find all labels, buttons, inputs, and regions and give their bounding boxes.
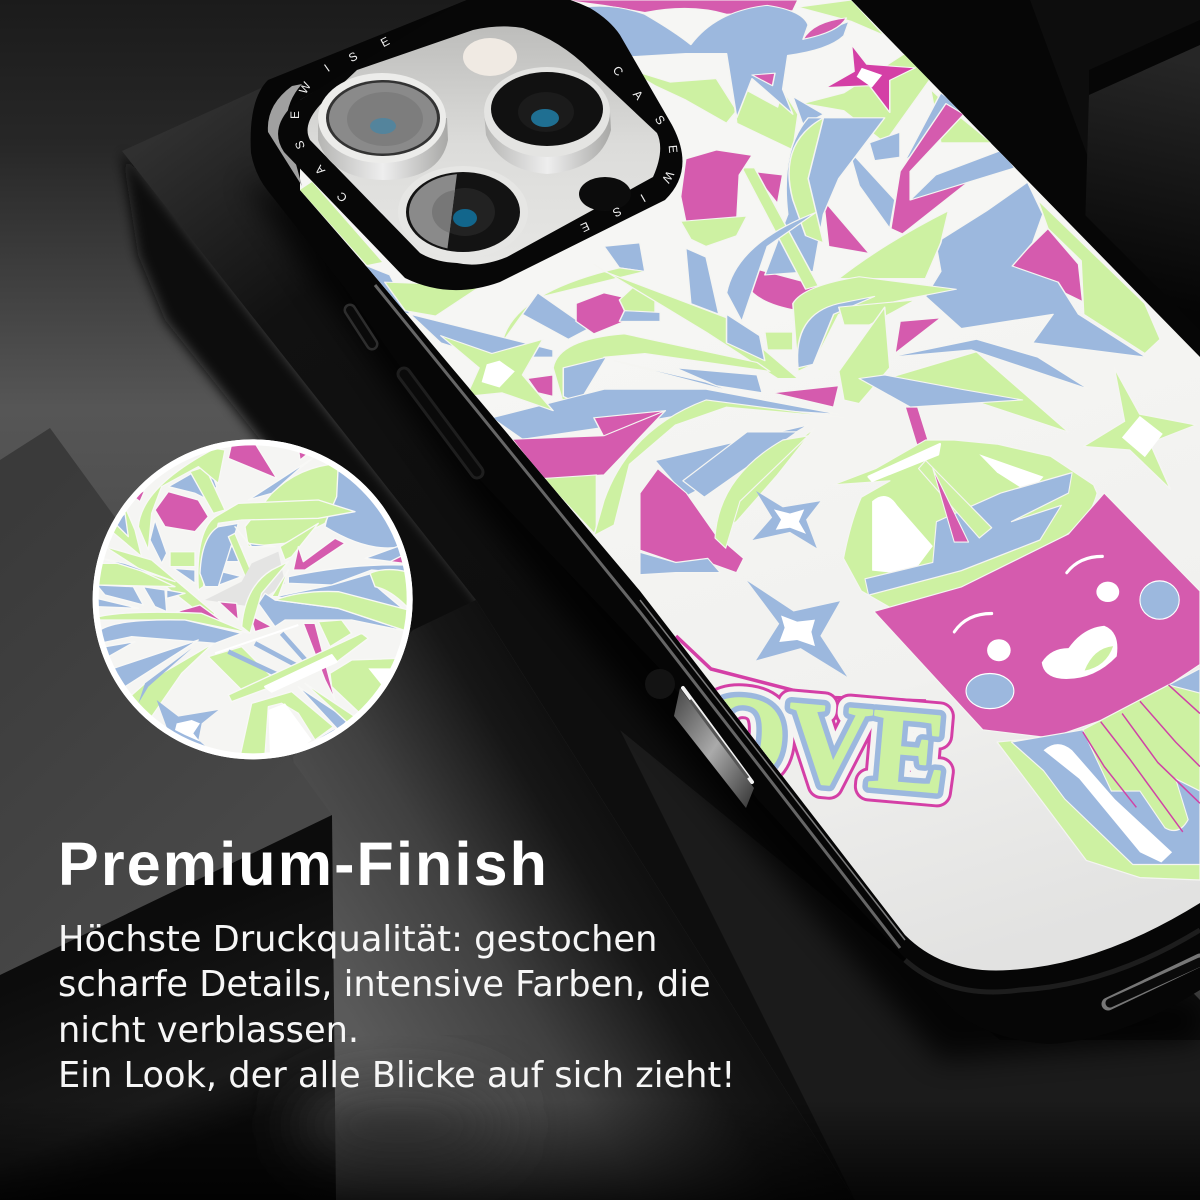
large blue star [747, 581, 847, 677]
flash [463, 38, 517, 76]
lower band [293, 600, 855, 1200]
case shadow [245, 180, 1200, 1060]
bezel brand text: E [288, 111, 302, 119]
bezel brand text: E [578, 219, 592, 235]
case highlight lines [375, 285, 900, 948]
face [954, 556, 1179, 709]
text block [58, 830, 735, 1096]
case body [251, 0, 1200, 1044]
power button recess [645, 669, 675, 699]
body copy: Höchste Druckqualität: gestochen [58, 919, 657, 960]
lower block top [0, 428, 332, 975]
small blue star [752, 491, 820, 548]
body copy [58, 919, 735, 1096]
jar and face artwork [640, 432, 1200, 880]
grey case reflection [268, 84, 302, 186]
sensor [579, 177, 631, 211]
bezel brand text: S [610, 204, 624, 220]
LOVE lettering: LOVE [614, 663, 953, 819]
bezel brand text: E [666, 144, 680, 154]
jar in detail [210, 648, 270, 688]
bezel brand text: A [630, 87, 646, 103]
phone case [245, 0, 1200, 1060]
block shadow wedge [122, 151, 500, 660]
body copy: nicht verblassen. [58, 1010, 359, 1051]
LOVE lettering: LOVE [614, 663, 953, 819]
bezel brand text: E [378, 34, 392, 50]
side art sliver [300, 182, 382, 265]
bezel brand text: I [322, 61, 332, 75]
bezel brand text: W [296, 79, 314, 96]
right block [1085, 45, 1200, 350]
bezel brand text: S [652, 113, 668, 127]
bezel brand text: I [638, 191, 648, 205]
camera ring [278, 0, 682, 290]
jar [833, 440, 1097, 607]
heading: Premium-Finish [58, 830, 549, 898]
ultra wide lens [318, 73, 448, 180]
jar body [874, 493, 1200, 738]
phone back artwork [300, 0, 1200, 970]
body copy: scharfe Details, intensive Farben, die [58, 964, 711, 1005]
camera glass [308, 26, 660, 265]
charging port [1108, 960, 1200, 1004]
LOVE lettering: LOVE [614, 663, 953, 819]
bezel brand text: C [610, 63, 626, 79]
table area [620, 730, 1200, 1200]
camera island [278, 0, 682, 290]
bezel brand text: A [312, 162, 328, 178]
bezel brand text: C [334, 189, 350, 205]
upper right dark area [760, 0, 1200, 420]
LOVE lettering [714, 683, 955, 808]
main lens [406, 166, 520, 252]
bezel brand text: S [346, 49, 360, 65]
jar base [997, 740, 1200, 880]
telephoto lens [484, 67, 611, 174]
bezel brand text: S [292, 139, 308, 151]
side switch [350, 310, 372, 344]
power button [674, 688, 754, 808]
bezel brand text: W [659, 169, 677, 186]
LOVE outline trail [676, 636, 926, 701]
bezel brand text [288, 34, 680, 235]
body copy: Ein Look, der alle Blicke auf sich zieht! [58, 1055, 735, 1096]
volume button [404, 374, 477, 472]
lower block face [0, 815, 336, 1200]
plant artwork [354, 0, 1196, 536]
LOVE lettering: LOVE [614, 663, 953, 819]
detail magnifier circle [92, 439, 418, 763]
